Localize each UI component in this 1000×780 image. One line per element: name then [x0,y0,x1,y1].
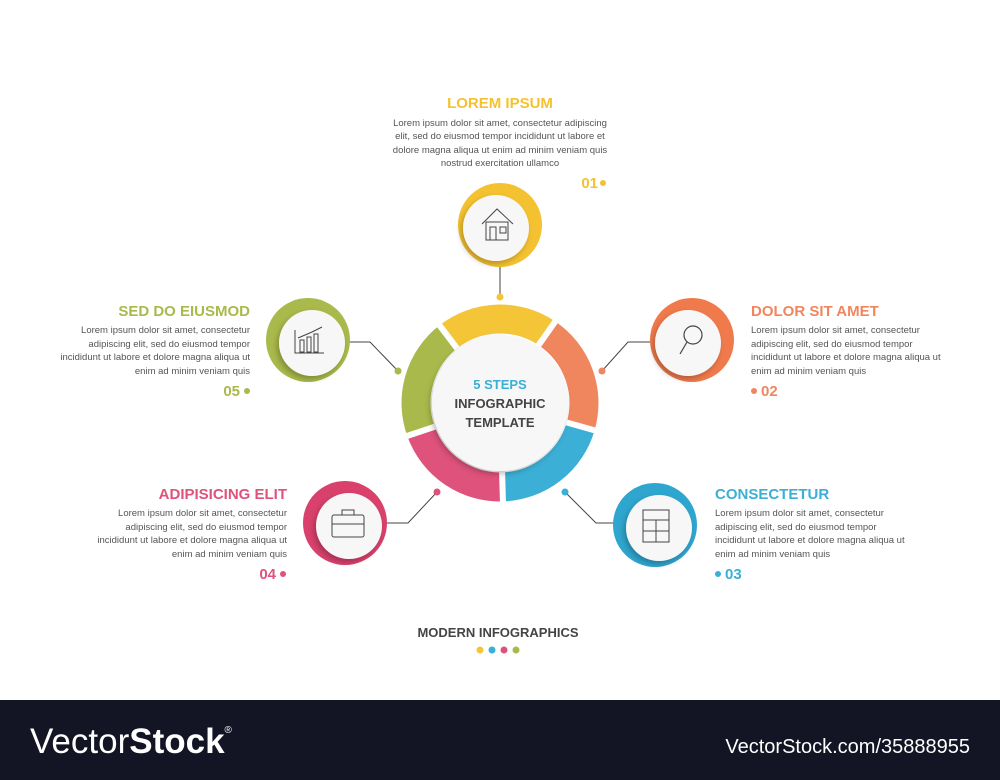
text block 01: nostrud exercitation ullamco [441,158,559,169]
text block 04: ADIPISICING ELIT [159,486,287,503]
text block 01: LOREM IPSUM [447,95,553,112]
central ring [404,319,597,504]
center title [454,377,546,430]
icon circle 04 [303,481,387,565]
footer bar: VectorStock [30,722,225,761]
bottom title: MODERN INFOGRAPHICS [417,625,579,640]
text block 04: Lorem ipsum dolor sit amet, consectetur [118,508,287,519]
text block 04 [97,486,287,583]
icon circle 01 [458,183,542,267]
text block 03 [715,486,905,583]
text block 02: incididunt ut labore et dolore magna aliqua ut [751,352,941,363]
bottom title [417,625,579,654]
text block 03: incididunt ut labore et dolore magna aliqua ut [715,535,905,546]
text block 04: adipiscing elit, sed do eiusmod tempor [125,522,287,533]
connectors [350,265,650,523]
text block 04: incididunt ut labore et dolore magna aliqua ut [97,535,287,546]
text block 01: 01 [581,175,598,192]
text block 05: Lorem ipsum dolor sit amet, consectetur [81,325,250,336]
text block 05: adipiscing elit, sed do eiusmod tempor [88,339,250,350]
text block 05: 05 [223,383,240,400]
center title: TEMPLATE [465,415,535,430]
text block 04: 04 [259,566,277,583]
text block 05: SED DO EIUSMOD [118,303,250,320]
text block 03: Lorem ipsum dolor sit amet, consectetur [715,508,884,519]
text block 01: dolore magna aliqua ut enim ad minim veniam quis [393,145,607,156]
text block 03: adipiscing elit, sed do eiusmod tempor [715,522,877,533]
text block 02: Lorem ipsum dolor sit amet, consectetur [751,325,920,336]
text block 05: enim ad minim veniam quis [135,366,250,377]
text block 05: incididunt ut labore et dolore magna aliqua ut [60,352,250,363]
footer bar: ® [225,725,233,736]
text block 02: DOLOR SIT AMET [751,303,879,320]
text block 05 [60,303,250,400]
icon circle 03 [613,483,697,567]
center title: 5 STEPS [473,377,527,392]
footer bar [0,700,1000,780]
icon circle 02 [650,298,734,382]
text block 03: CONSECTETUR [715,486,829,503]
center title: INFOGRAPHIC [454,396,546,411]
text block 02: adipiscing elit, sed do eiusmod tempor [751,339,913,350]
text block 01 [393,95,607,192]
text block 03: enim ad minim veniam quis [715,549,830,560]
text block 03: 03 [725,566,742,583]
text block 02: 02 [761,383,778,400]
text block 01: Lorem ipsum dolor sit amet, consectetur adipiscing [393,118,607,129]
text block 02: enim ad minim veniam quis [751,366,866,377]
text block 04: enim ad minim veniam quis [172,549,287,560]
text block 02 [751,303,941,400]
text block 01: elit, sed do eiusmod tempor incididunt ut labore et [395,131,605,142]
icon circle 05 [266,298,350,382]
footer bar: VectorStock.com/35888955 [725,736,970,758]
